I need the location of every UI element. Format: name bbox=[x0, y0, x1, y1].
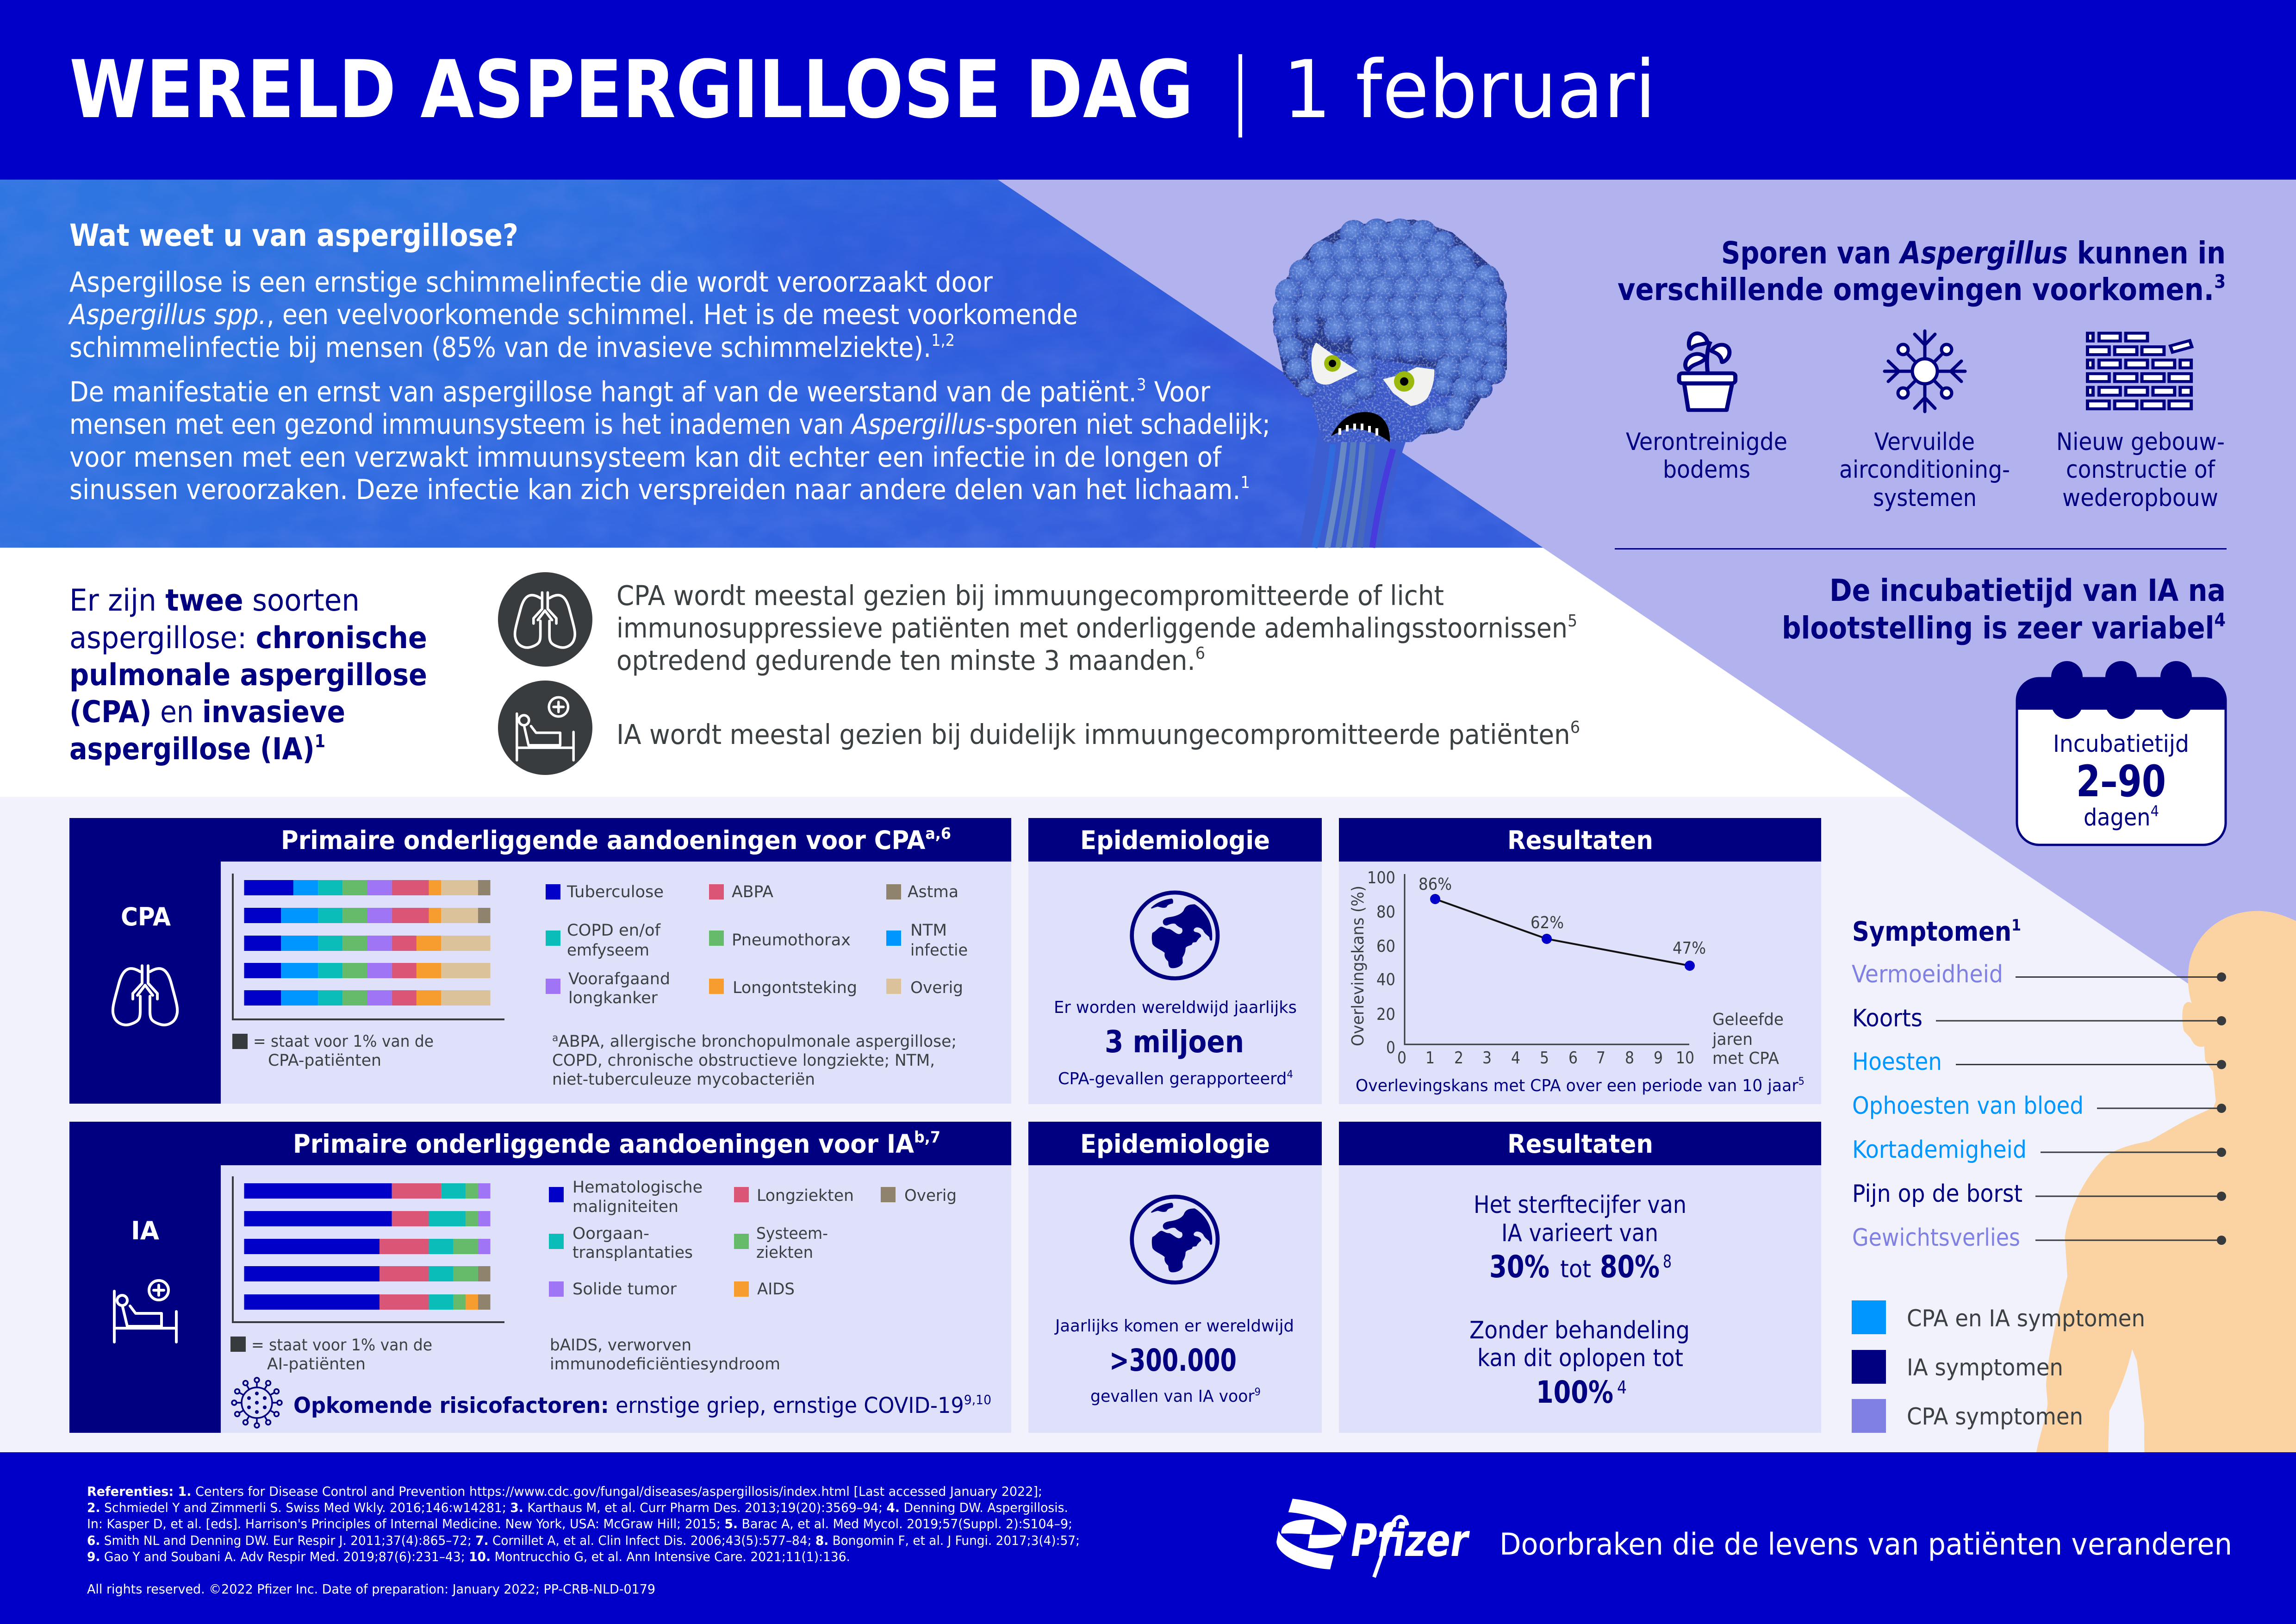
legend: cpa conditions: infectie bbox=[910, 941, 968, 960]
text: ia description: 6 bbox=[1570, 718, 1580, 737]
symptoms list: Symptomen bbox=[1852, 916, 2033, 947]
references: 6. Smith NL and Denning DW. Eur Respir J. 2011;37(4):865–72; 7. Cornillet A, et al. Clin Infect Dis. 2006;43(5):577–84; 8. Bongomin F, et al. J Fungi. 2017;3(4):57; bbox=[87, 1533, 1080, 1548]
legend: cpa conditions: Longontsteking bbox=[733, 979, 857, 997]
legend: ia conditions: AIDS bbox=[757, 1280, 795, 1299]
hero blue diagonal panel bbox=[0, 180, 1543, 548]
legend: cpa conditions: Astma bbox=[908, 883, 958, 901]
footnote: cpa abbreviations bbox=[552, 1032, 957, 1089]
symptoms list: Vermoeidheid bbox=[1852, 961, 2003, 988]
text block: twee soorten aspergillose bbox=[69, 583, 427, 767]
label: verontreinigde bodems: bodems bbox=[1663, 456, 1750, 484]
text: cpa description: 5 bbox=[1568, 612, 1577, 631]
icon: patient in bed bbox=[114, 1280, 176, 1342]
symptoms list: Hoesten bbox=[1852, 1048, 1942, 1076]
panel: cpa underlying conditions: Primaire onderliggende aandoeningen voor CPA bbox=[281, 825, 970, 855]
line chart: overlevingskans: 6 bbox=[1568, 1049, 1578, 1068]
footnote: ia abbreviations: immunodeficiëntiesyndroom bbox=[550, 1355, 780, 1374]
line chart: overlevingskans: Overlevingskans (%) bbox=[1349, 886, 1368, 1046]
title: WERELD ASPERGILLOSE DAG bbox=[69, 43, 1194, 136]
icon: plant in pot bbox=[1679, 333, 1736, 410]
text block: twee soorten aspergillose: 1 bbox=[315, 731, 325, 751]
line chart: overlevingskans: met CPA bbox=[1712, 1049, 1779, 1068]
line chart: overlevingskans: 7 bbox=[1596, 1049, 1605, 1068]
pfizer logo bbox=[1276, 1499, 1470, 1577]
legend: ia conditions: Longziekten bbox=[757, 1187, 854, 1205]
references: 2. Schmiedel Y and Zimmerli S. Swiss Med Wkly. 2016;146:w14281; 3. Karthaus M, et al. Curr Pharm Des. 2013;19(20):3569–94; 4. Denning DW. Aspergillosis. bbox=[87, 1500, 1068, 1515]
text block: twee soorten aspergillose: (CPA) en invasieve bbox=[69, 695, 345, 730]
panel: ia outcomes: 8 bbox=[1663, 1251, 1672, 1272]
calendar callout: incubatietijd 2-90 dagen bbox=[2016, 661, 2227, 845]
line chart: overlevingskans: 2 bbox=[1454, 1049, 1463, 1068]
label: nieuw gebouw-constructie bbox=[2056, 428, 2225, 512]
references: In: Kasper D, et al. [eds]. Harrison's Principles of Internal Medicine. New York, USA: McGraw Hill; 2015; 5. Barac A, et al. Med Mycol. 2019;57(Suppl. 2):S104–9; bbox=[87, 1516, 1072, 1531]
legend: symptoms bbox=[1852, 1300, 2145, 1433]
heading: sporen van aspergillus bbox=[1618, 235, 2226, 307]
panel: cpa outcomes: Overlevingskans met CPA over een periode van 10 jaar bbox=[1356, 1076, 1817, 1095]
icon: globe bbox=[1132, 1197, 1218, 1282]
symptoms list: Gewichtsverlies bbox=[1852, 1224, 2020, 1252]
panel: ia epidemiology: >300.000 bbox=[1109, 1343, 1237, 1378]
panel: cpa epidemiology: Epidemiologie bbox=[1080, 825, 1270, 855]
legend: cpa conditions: COPD en/of bbox=[567, 921, 661, 940]
panel: ia epidemiology: Jaarlijks komen er wereldwijd bbox=[1054, 1317, 1294, 1336]
text: cpa description: optredend gedurende ten minste 3 maanden. bbox=[616, 644, 1241, 676]
panel: ia outcomes: kan dit oplopen tot bbox=[1477, 1344, 1683, 1372]
panel: ia outcomes: Zonder behandeling bbox=[1469, 1317, 1690, 1344]
text block: twee soorten aspergillose: pulmonale aspergillose bbox=[69, 658, 427, 693]
line chart: overlevingskans: 3 bbox=[1482, 1049, 1492, 1068]
panel: ia epidemiology bbox=[1028, 1122, 1322, 1433]
references: Referenties: 1. Centers for Disease Control and Prevention https://www.cdc.gov/fungal/diseases/aspergillosis/index.html [Last accessed January 2022]; bbox=[87, 1484, 1042, 1499]
text block: wat weet u van aspergillose bbox=[68, 218, 1270, 506]
label: nieuw gebouw-constructie: Nieuw gebouw- bbox=[2056, 428, 2225, 456]
symptoms list bbox=[1852, 916, 2226, 1252]
panel: ia outcomes: IA varieert van bbox=[1501, 1219, 1658, 1247]
legend: ia conditions: maligniteiten bbox=[572, 1198, 678, 1216]
footnote: cpa abbreviations: niet-tuberculeuze mycobacteriën bbox=[552, 1070, 815, 1089]
label: verontreinigde bodems bbox=[1626, 428, 1787, 484]
legend: cpa conditions: NTM bbox=[910, 921, 947, 940]
mascot: angry aspergillus spore bbox=[1273, 219, 1507, 548]
text: cpa description bbox=[616, 580, 1577, 676]
label: verontreinigde bodems: Verontreinigde bbox=[1626, 428, 1787, 456]
panel: cpa epidemiology: 3 miljoen bbox=[1105, 1024, 1244, 1060]
panel: ia sidebar bbox=[69, 1122, 221, 1433]
references bbox=[87, 1484, 1080, 1597]
panel: ia sidebar: IA bbox=[131, 1216, 159, 1245]
line chart: overlevingskans: 80 bbox=[1376, 903, 1395, 922]
icon: snowflake bbox=[1885, 331, 1965, 412]
heading: sporen van aspergillus: verschillende omgevingen voorkomen. bbox=[1618, 272, 2284, 307]
line chart: overlevingskans: 47% bbox=[1673, 939, 1706, 958]
line chart: overlevingskans bbox=[1349, 868, 1784, 1068]
lavender diagonal panel bbox=[998, 180, 2296, 1056]
line chart: overlevingskans: 4 bbox=[1511, 1049, 1520, 1068]
text block: twee soorten aspergillose: aspergillose (IA) bbox=[69, 732, 348, 767]
line chart: overlevingskans: 0 bbox=[1386, 1038, 1395, 1057]
calendar callout: incubatietijd 2-90 dagen: dagen bbox=[2084, 804, 2158, 831]
text block: wat weet u van aspergillose: 1 bbox=[1240, 473, 1250, 492]
panel: ia epidemiology: Epidemiologie bbox=[1080, 1129, 1270, 1159]
line chart: overlevingskans: 60 bbox=[1376, 937, 1395, 956]
label: vervuilde airconditioning-systemen bbox=[1839, 428, 2010, 512]
text block: wat weet u van aspergillose: Aspergillose is een ernstige schimmelinfectie die wordt veroorzaakt door bbox=[69, 266, 993, 299]
panel: cpa sidebar: CPA bbox=[121, 902, 171, 931]
text: cpa description: 6 bbox=[1195, 644, 1205, 663]
key: 1 percent ia: = staat voor 1% van de bbox=[251, 1336, 432, 1355]
symptoms list: Ophoesten van bloed bbox=[1852, 1092, 2084, 1120]
legend: ia conditions: Solide tumor bbox=[572, 1280, 677, 1299]
symptom leader lines bbox=[1936, 972, 2226, 1245]
tagline: Doorbraken die de levens van patiënten veranderen bbox=[1500, 1527, 2232, 1562]
panel: ia outcomes: Resultaten bbox=[1507, 1129, 1653, 1159]
icon: globe bbox=[1132, 893, 1218, 978]
legend: ia conditions: transplantaties bbox=[572, 1243, 693, 1262]
hero texture bbox=[0, 180, 1546, 548]
panel: ia underlying conditions: b,7 bbox=[914, 1128, 940, 1147]
text block: wat weet u van aspergillose: 1,2 bbox=[931, 331, 955, 350]
panel: ia outcomes: Het sterftecijfer van bbox=[1474, 1191, 1686, 1219]
calendar callout: incubatietijd 2-90 dagen: 4 bbox=[2151, 802, 2159, 820]
text block: wat weet u van aspergillose: Voor bbox=[1146, 376, 1210, 408]
panel: ia outcomes: 100% bbox=[1536, 1374, 1613, 1410]
legend: cpa conditions bbox=[546, 883, 968, 1007]
text block: wat weet u van aspergillose: De manifestatie en ernst van aspergillose hangt af van de weerstand van de patiënt. bbox=[69, 376, 1253, 408]
legend: symptoms: CPA symptomen bbox=[1907, 1403, 2083, 1430]
panel: cpa epidemiology: CPA-gevallen gerapporteerd bbox=[1058, 1069, 1292, 1088]
text block: wat weet u van aspergillose: mensen met een gezond immuunsysteem is het inademen van Aspergillus-sporen niet schadelijk; bbox=[69, 408, 1270, 441]
text block: twee soorten aspergillose: aspergillose: chronische bbox=[69, 621, 427, 656]
legend: cpa conditions: Pneumothorax bbox=[732, 931, 851, 949]
panel: ia outcomes: 4 bbox=[1617, 1377, 1627, 1398]
text: cpa description: immunosuppressieve patiënten met onderliggende ademhalingsstoornissen bbox=[616, 612, 1658, 644]
references: 9. Gao Y and Soubani A. Adv Respir Med. 2019;87(6):231–43; 10. Montrucchio G, et al. Ann Intensive Care. 2021;11(1):136. bbox=[87, 1549, 850, 1564]
calendar callout: incubatietijd 2-90 dagen: Incubatietijd bbox=[2053, 731, 2189, 758]
white intro band bbox=[0, 548, 2296, 797]
heading: incubatietijd: De incubatietijd van IA na bbox=[1829, 573, 2226, 608]
calendar callout: incubatietijd 2-90 dagen: 2–90 bbox=[2076, 756, 2166, 807]
panel: cpa outcomes: Resultaten bbox=[1507, 825, 1653, 855]
legend: ia conditions: Hematologische bbox=[572, 1178, 703, 1197]
heading: sporen van aspergillus: 3 bbox=[2214, 271, 2226, 293]
panel: cpa underlying conditions bbox=[221, 818, 1011, 1104]
text: opkomende risicofactoren: 9,10 bbox=[964, 1392, 991, 1407]
panel: cpa outcomes bbox=[1339, 818, 1821, 1104]
line chart: overlevingskans: 9 bbox=[1654, 1049, 1663, 1068]
panel: cpa sidebar bbox=[69, 818, 221, 1104]
symptoms list: Pijn op de borst bbox=[1852, 1180, 2022, 1208]
panel: ia epidemiology: 9 bbox=[1255, 1387, 1261, 1398]
legend: cpa conditions: emfyseem bbox=[567, 941, 649, 960]
pfizer logo: Pfizer bbox=[1351, 1515, 1470, 1567]
legend: ia conditions: Systeem- bbox=[756, 1224, 828, 1243]
references: All rights reserved. ©2022 Pfizer Inc. Date of preparation: January 2022; PP-CRB-NLD-0179 bbox=[87, 1581, 655, 1597]
header band bbox=[0, 0, 2296, 180]
icon: virus bbox=[232, 1378, 282, 1428]
legend: cpa conditions: Overig bbox=[910, 979, 963, 997]
line chart: overlevingskans: 5 bbox=[1540, 1049, 1549, 1068]
panel: ia outcomes: 80% bbox=[1600, 1249, 1660, 1285]
key: 1 percent cpa bbox=[232, 1032, 434, 1070]
panel: cpa underlying conditions: a,6 bbox=[925, 824, 951, 843]
panel: ia underlying conditions bbox=[221, 1122, 1011, 1433]
body silhouette bbox=[2036, 911, 2296, 1455]
text block: wat weet u van aspergillose: voor mensen met een verzwakt immuunsysteem kan dit echter een infectie in de longen of bbox=[69, 441, 1222, 474]
label: vervuilde airconditioning-systemen: systemen bbox=[1873, 484, 1977, 512]
bar chart: cpa bbox=[232, 874, 504, 1020]
key: 1 percent cpa: = staat voor 1% van de bbox=[253, 1032, 434, 1051]
line chart: overlevingskans: 10 bbox=[1676, 1049, 1694, 1068]
panel: cpa outcomes: 5 bbox=[1798, 1076, 1804, 1087]
line chart: overlevingskans: 8 bbox=[1625, 1049, 1634, 1068]
legend: ia conditions: Oorgaan- bbox=[572, 1224, 649, 1243]
icon: lungs bbox=[113, 966, 177, 1025]
bar chart: ia bbox=[232, 1176, 504, 1323]
footnote: cpa abbreviations: a bbox=[552, 1032, 558, 1044]
panel: ia outcomes: 30% bbox=[1489, 1249, 1549, 1285]
line chart: overlevingskans: jaren bbox=[1712, 1030, 1753, 1049]
line chart: overlevingskans: 40 bbox=[1376, 970, 1395, 989]
icon: brick wall bbox=[2088, 333, 2192, 409]
heading: incubatietijd: 4 bbox=[2215, 610, 2226, 631]
panel: ia epidemiology: gevallen van IA voor bbox=[1090, 1387, 1261, 1406]
legend: ia conditions: Overig bbox=[904, 1187, 957, 1205]
text block: wat weet u van aspergillose: schimmelinfectie bij mensen (85% van de invasieve schimmelziekte). bbox=[69, 331, 1039, 364]
key: 1 percent cpa: CPA-patiënten bbox=[268, 1051, 381, 1070]
label: vervuilde airconditioning-systemen: Vervuilde bbox=[1874, 428, 1975, 456]
legend: ia conditions bbox=[549, 1178, 957, 1299]
line chart: overlevingskans: 62% bbox=[1531, 913, 1564, 932]
heading: sporen van aspergillus: Sporen van Aspergillus kunnen in bbox=[1721, 235, 2226, 271]
text: cpa description: CPA wordt meestal gezien bij immuungecompromitteerde of licht bbox=[616, 580, 1444, 612]
footer band bbox=[0, 1452, 2296, 1624]
panel: ia underlying conditions: Primaire onderliggende aandoeningen voor IA bbox=[293, 1129, 956, 1159]
footnote: cpa abbreviations: ABPA, allergische bronchopulmonale aspergillose; bbox=[558, 1032, 957, 1051]
symptoms list: Kortademigheid bbox=[1852, 1136, 2027, 1164]
footnote: ia abbreviations: bAIDS, verworven bbox=[550, 1336, 691, 1355]
panel: cpa epidemiology bbox=[1028, 818, 1322, 1104]
heading: incubatietijd bbox=[1782, 573, 2226, 646]
line chart: overlevingskans: Geleefde bbox=[1712, 1010, 1784, 1029]
legend: cpa conditions: Voorafgaand bbox=[568, 970, 670, 988]
label: nieuw gebouw-constructie: wederopbouw bbox=[2062, 484, 2218, 512]
line chart: overlevingskans: 20 bbox=[1376, 1005, 1395, 1024]
text block: wat weet u van aspergillose: sinussen veroorzaken. Deze infectie kan zich verspreiden naar andere delen van het lichaam. bbox=[69, 474, 1372, 506]
icon: lungs in circle bbox=[498, 572, 592, 667]
text block: wat weet u van aspergillose: Aspergillus spp., een veelvoorkomende schimmel. Het is de meest voorkomende bbox=[68, 299, 1078, 331]
legend: ia conditions: ziekten bbox=[756, 1243, 813, 1262]
label: nieuw gebouw-constructie: constructie of bbox=[2066, 456, 2216, 484]
legend: symptoms: CPA en IA symptomen bbox=[1907, 1305, 2145, 1332]
legend: cpa conditions: longkanker bbox=[568, 989, 658, 1007]
panel: cpa epidemiology: 4 bbox=[1287, 1069, 1293, 1081]
text block: wat weet u van aspergillose: 3 bbox=[1137, 375, 1146, 394]
title divider bbox=[1238, 54, 1242, 137]
panel: ia outcomes: tot bbox=[1560, 1255, 1591, 1283]
footnote: cpa abbreviations: COPD, chronische obstructieve longziekte; NTM, bbox=[552, 1051, 935, 1070]
legend: symptoms: IA symptomen bbox=[1907, 1354, 2063, 1381]
label: vervuilde airconditioning-systemen: airconditioning- bbox=[1839, 456, 2010, 484]
icon: patient in bed in circle bbox=[498, 681, 592, 775]
legend: cpa conditions: ABPA bbox=[732, 883, 773, 901]
symptoms list: 1 bbox=[2011, 916, 2021, 935]
key: 1 percent ia: AI-patiënten bbox=[267, 1355, 366, 1374]
line chart: overlevingskans: 0 bbox=[1397, 1049, 1406, 1068]
symptoms list: Koorts bbox=[1852, 1005, 1923, 1032]
line chart: overlevingskans: 1 bbox=[1425, 1049, 1435, 1068]
footnote: ia abbreviations bbox=[550, 1336, 780, 1374]
text block: twee soorten aspergillose: Er zijn twee soorten bbox=[69, 583, 360, 618]
panel: cpa epidemiology: Er worden wereldwijd jaarlijks bbox=[1054, 998, 1297, 1017]
text block: wat weet u van aspergillose: Wat weet u van aspergillose? bbox=[69, 218, 518, 253]
title date: 1 februari bbox=[1283, 43, 1656, 136]
heading: incubatietijd: blootstelling is zeer variabel bbox=[1782, 610, 2274, 646]
line chart: overlevingskans: 100 bbox=[1367, 868, 1395, 887]
line chart: overlevingskans: 86% bbox=[1419, 875, 1452, 894]
key: 1 percent ia bbox=[230, 1336, 432, 1374]
text: opkomende risicofactoren: Opkomende risicofactoren: ernstige griep, ernstige COVID-19 bbox=[293, 1393, 983, 1418]
text: ia description: IA wordt meestal gezien bij duidelijk immuungecompromitteerde patiënten bbox=[616, 718, 1644, 750]
legend: cpa conditions: Tuberculose bbox=[566, 883, 664, 901]
panel: ia outcomes bbox=[1339, 1122, 1821, 1433]
